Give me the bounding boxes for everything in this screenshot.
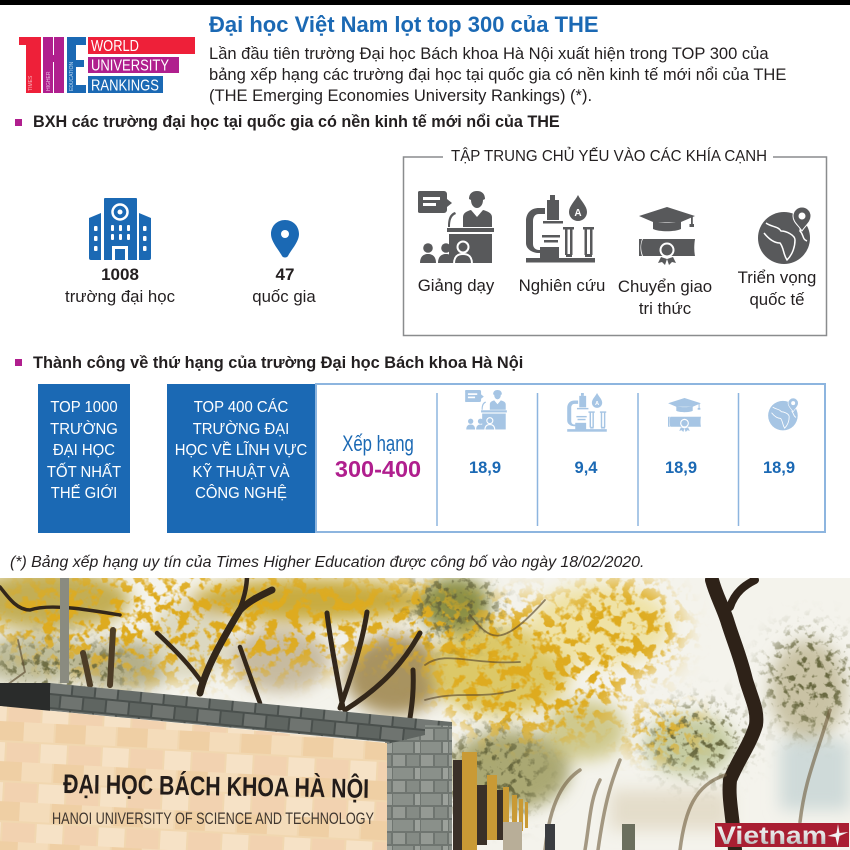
box: top 400: KỸ THUẬT VÀ: [192, 464, 290, 480]
aspect: knowledge transfer: [618, 207, 712, 318]
wall sand stone: [0, 706, 387, 850]
score: research: [567, 393, 607, 477]
intro text: (THE Emerging Economies University Rankings) (*).: [209, 86, 592, 105]
logo: THE World University Rankings: RANKINGS: [91, 78, 159, 94]
frame: [402, 156, 828, 336]
aspect: research: [519, 195, 605, 295]
logo: THE World University Rankings: UNIVERSITY: [91, 58, 169, 74]
lamp pole: [60, 578, 69, 683]
logo: THE World University Rankings: EDUCATION: [69, 62, 75, 91]
value: 18,9: [469, 459, 501, 477]
box: top 400: [167, 384, 315, 533]
icon: teaching: [418, 191, 494, 263]
icon: globe: [758, 208, 810, 264]
box: top 1000: [38, 384, 130, 533]
label: trường đại học: [65, 287, 175, 306]
intro text: [209, 44, 786, 105]
leaf speckle: yellow: [0, 565, 700, 752]
box: top 400: TRƯỜNG ĐẠI: [193, 420, 289, 438]
icon: microscope: [526, 195, 595, 262]
stat: universities: [65, 198, 175, 306]
divider lines: [436, 393, 740, 526]
score: teaching: [465, 390, 507, 477]
logo: THE World University Rankings: HIGHER: [46, 71, 52, 91]
photo: university gate with autumn trees: [0, 578, 850, 850]
title: Đại học Việt Nam lọt top 300 của THE: [209, 12, 599, 37]
box: top 400: TOP 400 CÁC: [194, 399, 288, 416]
leaf speckle: dark green: [0, 570, 850, 820]
VietnamPlus logo: Vietnam: [717, 822, 827, 850]
value: 18,9: [665, 459, 697, 477]
icon: university building: [89, 198, 151, 260]
box: top 400: CÔNG NGHỆ: [195, 485, 287, 502]
box: top 1000: THẾ GIỚI: [51, 485, 117, 502]
logo: THE World University Rankings: WORLD: [91, 38, 139, 55]
icon: graduation cap: [668, 398, 701, 432]
logo: THE World University Rankings: [19, 37, 195, 94]
wall sign text: [52, 768, 374, 828]
label: tri thức: [639, 299, 691, 318]
aspect: teaching: [418, 191, 494, 295]
icon: graduation cap: [639, 207, 695, 265]
panel: focus aspects: [402, 146, 828, 336]
panel: ranking table: [315, 383, 826, 533]
heading: rankings: BXH các trường đại học tại quốc gia có nền kinh tế mới nổi của THE: [33, 113, 560, 131]
icon: microscope: [567, 393, 607, 432]
icon: globe: [768, 398, 798, 430]
rank value: 300-400: [335, 456, 421, 482]
box: top 1000: ĐẠI HỌC: [53, 442, 115, 459]
footnote: (*) Bảng xếp hạng uy tín của Times Higher Education được công bố vào ngày 18/02/2020.: [10, 554, 644, 571]
panel heading: TẬP TRUNG CHỦ YẾU VÀO CÁC KHÍA CẠNH: [451, 148, 767, 165]
pillars and fence: [453, 760, 503, 850]
box: top 1000: TRƯỜNG: [50, 420, 118, 438]
box: top 1000: TOP 1000: [50, 399, 118, 416]
score: transfer: [665, 398, 701, 477]
aspect: international outlook: [738, 208, 816, 309]
intro text: bảng xếp hạng các trường đại học tại quốc gia có nền kinh tế mới nổi của THE: [209, 65, 786, 84]
top black bar: [0, 0, 850, 5]
label: Chuyển giao: [618, 277, 712, 296]
number: 1008: [101, 265, 139, 284]
box: top 1000: TỐT NHẤT: [47, 464, 121, 480]
heading: HUST success: Thành công về thứ hạng của trường Đại học Bách khoa Hà Nội: [33, 354, 523, 372]
rank label: Xếp hạng: [342, 431, 414, 456]
number: 47: [276, 265, 294, 284]
branches and trunks: [0, 578, 830, 850]
intro text: Lần đầu tiên trường Đại học Bách khoa Hà Nội xuất hiện trong TOP 300 của: [209, 44, 769, 63]
value: 18,9: [763, 459, 795, 477]
icon: location pin: [271, 220, 299, 258]
value: 9,4: [575, 459, 597, 477]
label: quốc gia: [252, 287, 316, 306]
foliage wash: [0, 570, 850, 830]
label: Triển vọng: [738, 268, 816, 287]
label: Nghiên cứu: [519, 276, 605, 295]
wall top, grey stone: [0, 683, 452, 850]
label: quốc tế: [749, 290, 805, 309]
wall sign text: HANOI UNIVERSITY OF SCIENCE AND TECHNOLOGY: [52, 809, 374, 828]
logo: THE World University Rankings: TIMES: [28, 75, 34, 91]
stat: countries: [252, 220, 316, 306]
box: top 400: HỌC VỀ LĨNH VỰC: [175, 442, 307, 459]
label: Giảng dạy: [418, 276, 494, 295]
pedestrians: [503, 822, 635, 850]
score: international: [763, 398, 798, 477]
label: [618, 277, 712, 318]
label: [738, 268, 816, 309]
wall sign text: ĐẠI HỌC BÁCH KHOA HÀ NỘI: [63, 768, 369, 804]
icon: teaching: [465, 390, 507, 430]
